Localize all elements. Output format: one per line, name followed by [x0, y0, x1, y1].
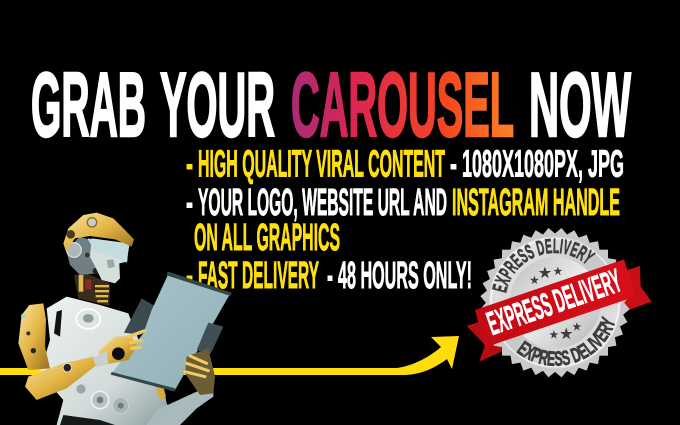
bullet: logo, website url and instagram handle [186, 182, 620, 259]
bullet: high quality viral content: - [186, 144, 193, 186]
lower right arm [147, 387, 213, 425]
feature bullet list: 48 HOURS ONLY! [338, 255, 472, 297]
right hand [185, 348, 215, 395]
lower chest rings [76, 384, 129, 414]
left tablet handle [124, 298, 156, 335]
seal arc text: EXPRESS DELIVERY [516, 316, 616, 366]
stars: ★ [553, 267, 562, 278]
forearm [25, 357, 97, 400]
title: GRAB [31, 55, 146, 156]
stars: ★ [560, 326, 573, 342]
bullet: logo, website url and instagram handle: ON ALL GRAPHICS [194, 217, 340, 259]
neck [74, 273, 110, 306]
ribbon tails [467, 266, 652, 362]
stars: ★ [539, 264, 552, 280]
seal arc text: EXPRESS DELIVERY [492, 238, 596, 293]
stars: ★ [549, 330, 558, 341]
bullet: logo, website url and instagram handle: - [186, 182, 193, 224]
shoulder plate [18, 303, 50, 370]
icon: robot with tablet [18, 213, 232, 425]
head side [66, 237, 100, 275]
stars [530, 264, 581, 342]
feature bullet list [186, 144, 624, 297]
bullet: fast delivery: FAST DELIVERY [198, 255, 319, 297]
stars: ★ [530, 275, 539, 286]
bullet: high quality viral content: - [450, 144, 457, 186]
stars: ★ [572, 322, 581, 333]
right tablet handle [197, 323, 223, 354]
arrow [0, 336, 459, 375]
chest ring [76, 309, 100, 329]
seal arc text [492, 238, 616, 366]
belly dark [60, 415, 115, 425]
tablet [112, 274, 230, 390]
seal starburst [480, 228, 630, 377]
title: YOUR [160, 55, 275, 156]
chest dark gap [54, 310, 62, 337]
helmet [63, 213, 134, 252]
bullet: fast delivery: - [186, 255, 193, 297]
left hand [98, 331, 145, 365]
right side gold plate [143, 340, 166, 400]
ribbon band [475, 259, 635, 347]
title [31, 55, 631, 156]
express delivery badge [466, 228, 652, 378]
face [90, 238, 128, 283]
torso [40, 297, 180, 425]
visor [87, 238, 129, 263]
bullet: fast delivery: - [327, 255, 333, 297]
